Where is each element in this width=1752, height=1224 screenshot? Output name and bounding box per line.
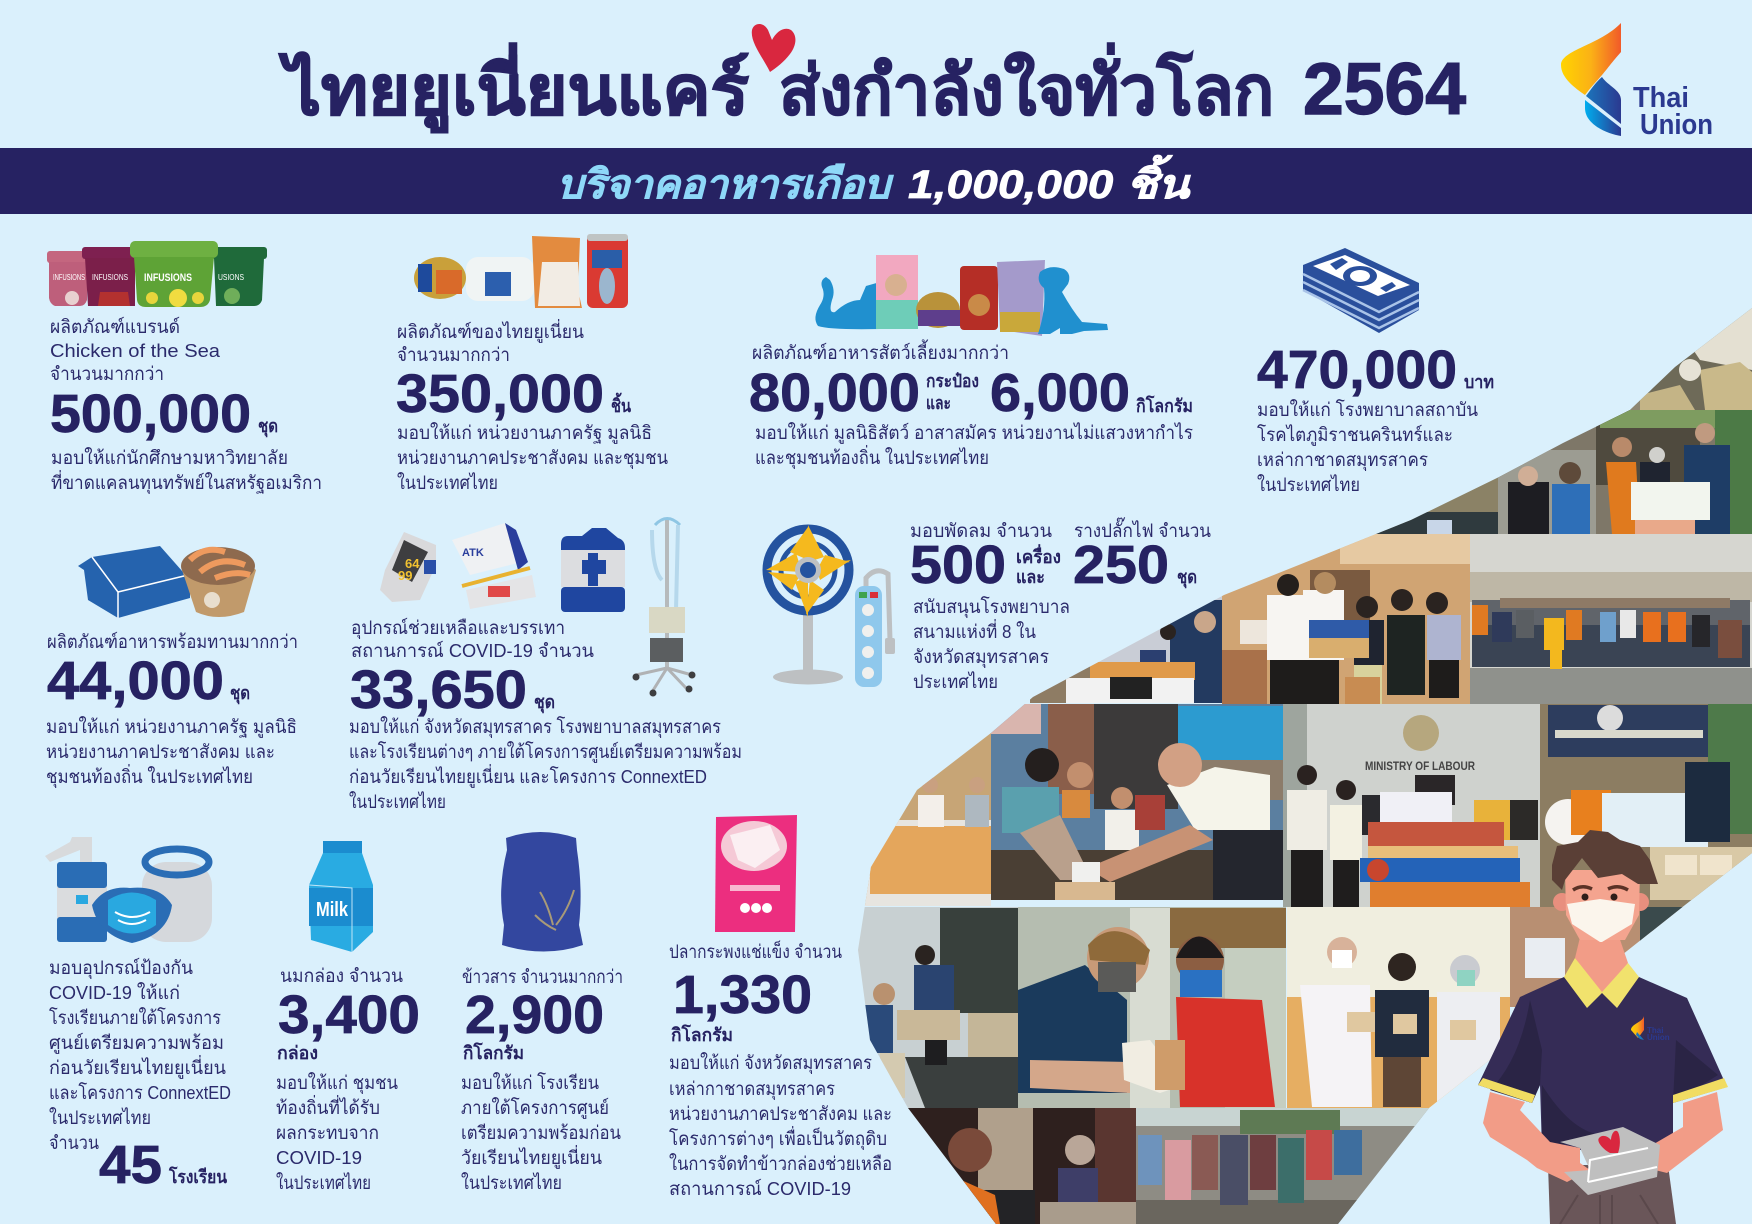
photo collage — [855, 300, 1752, 1224]
logo: Thai Union: Thai — [1633, 82, 1689, 114]
section: boxed milk: 3,400 — [278, 985, 420, 1045]
hair — [1552, 830, 1658, 890]
section: pet food: 80,000 — [749, 363, 920, 423]
photo: product box with logo — [1510, 907, 1682, 1007]
section: cash donation: โรคไตภูมิราชนครินทร์และ — [1257, 424, 1453, 446]
photo: warehouse team — [1470, 534, 1752, 704]
section: protective equipment: ก่อนวัยเรียนไทยยูเนี่ยน — [49, 1055, 226, 1079]
section: pet food: ผลิตภัณฑ์อาหารสัตว์เลี้ยงมากกว่า — [752, 339, 1009, 363]
section: Chicken of the Sea: ชุด — [258, 416, 278, 438]
section: Thai Union products — [396, 234, 668, 493]
photo: stacked boxes and dogs — [1626, 308, 1752, 412]
section: frozen sea bass: สถานการณ์ COVID-19 — [669, 1178, 851, 1199]
section: Chicken of the Sea: จำนวนมากกว่า — [50, 363, 164, 384]
section: COVID-19 equipment — [349, 518, 742, 812]
section: boxed milk: COVID-19 — [276, 1147, 362, 1168]
section: cash donation: ในประเทศไทย — [1257, 474, 1360, 495]
section: fans and power strips: ชุด — [1177, 567, 1197, 589]
icon: sanitizer gallon — [561, 528, 625, 612]
section: boxed milk: มอบให้แก่ ชุมชน — [276, 1072, 398, 1095]
heart on box — [1598, 1131, 1620, 1153]
photo: aid boxes and Red Cross — [864, 733, 991, 906]
left arm — [1483, 1092, 1590, 1182]
section: frozen sea bass: เหล่ากาชาดสมุทรสาคร — [669, 1078, 835, 1101]
section: rice: ในประเทศไทย — [461, 1172, 562, 1193]
section: protective equipment: จำนวน — [49, 1132, 99, 1153]
section: COVID-19 equipment: สถานการณ์ COVID-19 จำนวน — [351, 640, 594, 661]
photo: ministry of labour donation: MINISTRY OF LABOUR — [1365, 759, 1475, 773]
section: protective equipment: โรงเรียนภายใต้โครงการ — [49, 1007, 221, 1028]
photo: elderly woman at window — [900, 1108, 1136, 1224]
title: ไทยยูเนี่ยนแคร์ — [279, 42, 749, 134]
section: COVID-19 equipment: 33,650 — [350, 660, 527, 720]
section: rice: ภายใต้โครงการศูนย์ — [461, 1097, 609, 1119]
icon: ATK test kit: ATK — [462, 547, 484, 559]
image: product cups: INFUSIONS — [144, 272, 192, 284]
icon: lunch box and shrimp bowl — [78, 546, 256, 618]
logo: Thai Union — [1561, 23, 1713, 141]
ears — [1553, 893, 1571, 911]
section: boxed milk: นมกล่อง จำนวน — [280, 965, 403, 986]
image: product cups: INFUSIONS — [92, 273, 128, 282]
section: Thai Union products: 350,000 — [396, 364, 604, 424]
section: fans and power strips: มอบพัดลม จำนวน — [910, 520, 1052, 541]
icon: red heart — [752, 24, 795, 72]
section: Chicken of the Sea: มอบให้แก่นักศึกษามหาวิทยาลัย — [51, 447, 288, 468]
section: pet food: กิโลกรัม — [1136, 395, 1193, 416]
section: Thai Union products: มอบให้แก่ หน่วยงานภาครัฐ มูลนิธิ — [397, 422, 652, 444]
icon: ATK test kit — [452, 523, 536, 609]
eyes and brows — [1573, 887, 1628, 890]
icon: oxygen IV stand — [632, 518, 696, 696]
section: rice: เตรียมความพร้อมก่อน — [461, 1122, 621, 1143]
section: ready-to-eat meals: ชุมชนท้องถิ่น ในประเทศไทย — [46, 764, 253, 789]
title — [279, 42, 1466, 134]
section: rice: กิโลกรัม — [463, 1042, 524, 1063]
photo: ministry of labour donation — [1283, 704, 1540, 907]
section: pet food: มอบให้แก่ มูลนิธิสัตว์ อาสาสมัคร หน่วยงานไม่แสวงหากำไร — [755, 422, 1193, 444]
section: fans and power strips: 250 — [1073, 535, 1169, 595]
section: fans and power strips: และ — [1016, 567, 1045, 587]
section: frozen sea bass: ในการจัดทำข้าวกล่องช่วยเหลือ — [669, 1153, 892, 1174]
image: canned products — [414, 234, 628, 308]
section: protective equipment: ศูนย์เตรียมความพร้อม — [49, 1032, 224, 1054]
section: fans and power strips: ประเทศไทย — [913, 671, 998, 692]
section: pet food: 6,000 — [990, 363, 1130, 423]
photo: community crowd — [1136, 1108, 1430, 1224]
photo: hospital donation — [1030, 590, 1222, 703]
section: Thai Union products: ชิ้น — [611, 392, 632, 416]
collar — [1564, 958, 1639, 1008]
section: Chicken of the Sea: 500,000 — [50, 384, 251, 444]
shirt — [1478, 977, 1727, 1150]
section: COVID-19 equipment: มอบให้แก่ จังหวัดสมุทรสาคร โรงพยาบาลสมุทรสาคร — [349, 716, 721, 739]
section: pet food — [749, 255, 1193, 470]
section: boxed milk: กล่อง — [277, 1043, 318, 1063]
section: rice: 2,900 — [465, 985, 604, 1045]
section: frozen sea bass: มอบให้แก่ จังหวัดสมุทรสาคร — [669, 1052, 872, 1075]
section: protective equipment: มอบอุปกรณ์ป้องกัน — [49, 957, 193, 980]
section: ready-to-eat meals: มอบให้แก่ หน่วยงานภาครัฐ มูลนิธิ — [46, 716, 297, 738]
section: cash donation: บาท — [1464, 372, 1494, 392]
illustration: masked man in polo shirt holding food box: Union — [1647, 1033, 1670, 1042]
food box — [1560, 1127, 1660, 1195]
section: boxed milk: ในประเทศไทย — [276, 1172, 371, 1193]
sleeve cuffs — [1478, 1078, 1535, 1103]
section: protective equipment: COVID-19 ให้แก่ — [49, 982, 180, 1003]
section: Thai Union products: หน่วยงานภาคประชาสังคม และชุมชน — [397, 447, 668, 470]
section: pet food: กระป๋อง — [926, 371, 979, 391]
image: product cups: USIONS — [218, 273, 244, 282]
section: rice — [461, 832, 623, 1193]
section: boxed milk: ท้องถิ่นที่ได้รับ — [276, 1095, 380, 1118]
section: cash donation: มอบให้แก่ โรงพยาบาลสถาบัน — [1257, 399, 1478, 420]
section: fans and power strips: 500 — [910, 535, 1006, 595]
section: cash donation: 470,000 — [1257, 340, 1457, 400]
photo: monk and pets — [1498, 410, 1752, 534]
section: cash donation: เหล่ากาชาดสมุทรสาคร — [1257, 449, 1428, 472]
section: rice: วัยเรียนไทยยูเนี่ยน — [461, 1145, 602, 1169]
photo: warehouse crowd small — [1376, 478, 1498, 534]
image: pet food with cat and dog — [815, 255, 1108, 336]
section: COVID-19 equipment: ในประเทศไทย — [349, 791, 446, 812]
banner: บริจาคอาหารเกือบ — [557, 163, 894, 207]
section: fans and power strips: สนับสนุนโรงพยาบาล — [913, 596, 1070, 619]
banner — [0, 148, 1752, 214]
image: product cups — [47, 241, 267, 307]
section: rice: มอบให้แก่ โรงเรียน — [461, 1072, 599, 1093]
illustration: masked man in polo shirt holding food box: Thai — [1647, 1026, 1663, 1035]
pants — [1548, 1165, 1676, 1224]
section: ready-to-eat meals: ผลิตภัณฑ์อาหารพร้อมทานมากกว่า — [47, 631, 298, 652]
illustration: masked man in polo shirt holding food box — [1478, 830, 1728, 1224]
section: boxed milk: ผลกระทบจาก — [276, 1122, 379, 1143]
section: COVID-19 equipment: อุปกรณ์ช่วยเหลือและบรรเทา — [351, 617, 565, 640]
section: fans and power strips — [766, 517, 1211, 692]
face — [1565, 870, 1640, 940]
photo: animal foundation — [1540, 704, 1752, 907]
section: Thai Union products: จำนวนมากกว่า — [397, 344, 510, 365]
image: product cups: INFUSIONS — [53, 273, 85, 282]
section: COVID-19 equipment: และโรงเรียนต่างๆ ภายใต้โครงการศูนย์เตรียมความพร้อม — [349, 741, 742, 763]
section: pet food: และ — [926, 393, 951, 413]
section: cash donation — [1257, 248, 1494, 495]
section: Chicken of the Sea: Chicken of the Sea — [50, 340, 221, 361]
section: fans and power strips: จังหวัดสมุทรสาคร — [913, 646, 1049, 669]
section: Thai Union products: ผลิตภัณฑ์ของไทยยูเนี่ยน — [397, 319, 584, 343]
photo: man giving food to family — [991, 704, 1283, 900]
section: Chicken of the Sea: ที่ขาดแคลนทุนทรัพย์ในสหรัฐอเมริกา — [51, 470, 322, 495]
icon: pulse oximeter: 64 — [405, 556, 420, 571]
logo: Thai Union: Union — [1640, 109, 1713, 141]
photo: volunteer and boy in red — [1018, 907, 1286, 1108]
banner: 1,000,000 ชิ้น — [908, 154, 1191, 207]
photo: officials with box — [1222, 534, 1470, 704]
title: ส่งกำลังใจทั่วโลก — [779, 42, 1274, 129]
icon: rice sack — [501, 832, 583, 952]
icon: sanitizer, face shield and mask — [45, 837, 212, 943]
section: ready-to-eat meals: ชุด — [230, 683, 250, 705]
mask — [1567, 899, 1635, 942]
section: fans and power strips: สนามแห่งที่ 8 ใน — [913, 619, 1036, 642]
section: frozen sea bass: 1,330 — [673, 965, 812, 1025]
section: rice: ข้าวสาร จำนวนมากกว่า — [462, 966, 623, 987]
section: frozen sea bass: กิโลกรัม — [671, 1024, 733, 1045]
section: protective equipment: ในประเทศไทย — [49, 1107, 151, 1128]
section: COVID-19 equipment: ก่อนวัยเรียนไทยยูเนี่ยน และโครงการ ConnextED — [349, 764, 707, 788]
section: frozen sea bass — [669, 815, 892, 1199]
right arm — [1643, 1092, 1723, 1173]
neck — [1575, 925, 1628, 995]
section: ready-to-eat meals: หน่วยงานภาคประชาสังคม และ — [46, 741, 275, 762]
section: COVID-19 equipment: ชุด — [534, 692, 555, 714]
photo: unloading truck — [855, 907, 1018, 1108]
title: 2564 — [1303, 49, 1466, 130]
icon: milk carton — [309, 841, 373, 952]
section: ready-to-eat meals: 44,000 — [47, 651, 224, 711]
icon: pulse oximeter — [380, 532, 436, 602]
icon: power strip — [855, 571, 895, 687]
section: fans and power strips: รางปลั๊กไฟ จำนวน — [1074, 517, 1211, 541]
logo on shirt — [1631, 1016, 1644, 1038]
section: Thai Union products: ในประเทศไทย — [397, 472, 498, 493]
section: Chicken of the Sea — [47, 241, 322, 495]
icon: pink frozen fish bag — [715, 815, 797, 932]
photo: nurses with food — [1287, 907, 1510, 1108]
section: protective equipment — [45, 837, 231, 1195]
icon: stack of banknotes — [1303, 248, 1419, 333]
section: frozen sea bass: หน่วยงานภาคประชาสังคม และ — [669, 1103, 892, 1124]
icon: electric fan — [766, 525, 851, 684]
section: boxed milk — [276, 841, 420, 1193]
section: frozen sea bass: โครงการต่างๆ เพื่อเป็นวัตถุดิบ — [669, 1126, 887, 1151]
section: pet food: และชุมชนท้องถิ่น ในประเทศไทย — [755, 445, 989, 470]
section: protective equipment: และโครงการ ConnextED — [49, 1082, 231, 1103]
section: protective equipment: โรงเรียน — [168, 1166, 228, 1187]
icon: milk carton: Milk — [316, 899, 349, 921]
section: frozen sea bass: ปลากระพงแช่แข็ง จำนวน — [669, 939, 842, 962]
section: protective equipment: 45 — [99, 1135, 162, 1195]
icon: pulse oximeter: 99 — [398, 568, 412, 583]
section: fans and power strips: เครื่อง — [1016, 544, 1061, 567]
section: Chicken of the Sea: ผลิตภัณฑ์แบรนด์ — [50, 316, 180, 337]
section: ready-to-eat meals — [46, 546, 298, 789]
